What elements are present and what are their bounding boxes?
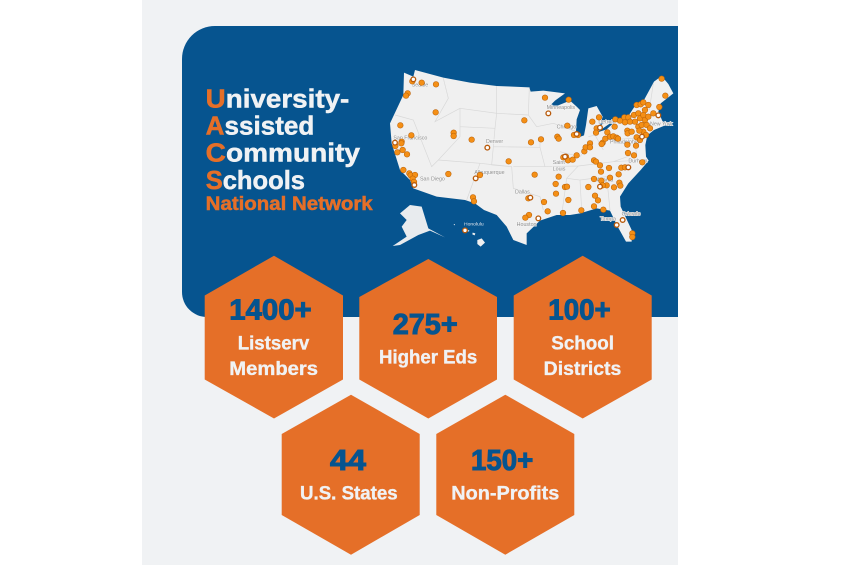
- stat hexagon: School Districts: 100+: [548, 294, 611, 326]
- stat hexagon: U.S. States: U.S. States: [300, 484, 398, 505]
- map: United States with network member locations: [390, 70, 673, 247]
- map: city labels: Atlanta: [597, 177, 613, 183]
- map: member location dots: [392, 76, 668, 240]
- map: Alaska: [393, 205, 445, 246]
- stat hexagon: Non-Profits: [436, 395, 574, 555]
- stat hexagon: Listserv Members: [205, 256, 343, 418]
- map: city labels: Dallas: [515, 189, 530, 195]
- map: city labels: [393, 83, 673, 228]
- stat hexagon: Higher Eds: 275+: [393, 309, 458, 341]
- title: Schools: [206, 165, 305, 195]
- map: city labels: Orlando: [622, 211, 641, 217]
- map: major city ring markers: [393, 77, 661, 233]
- map: city labels: Durham: [628, 159, 648, 165]
- map: city labels: Saint: [553, 160, 565, 166]
- stat hexagon: Higher Eds: [359, 259, 497, 418]
- panel: blue header: [182, 26, 678, 317]
- map: city labels: New York: [650, 121, 673, 127]
- title: University-: [206, 84, 349, 114]
- map: city labels: Houston: [517, 222, 537, 228]
- map: Hawaii: [454, 224, 485, 247]
- title: [206, 84, 361, 195]
- stat hexagon: Higher Eds: Higher Eds: [379, 348, 477, 369]
- stat hexagon: School Districts: [514, 256, 652, 418]
- map: city labels: Albuquerque: [474, 170, 505, 176]
- stat hexagon: Listserv Members: 1400+: [229, 294, 312, 326]
- subtitle: National Network: [206, 194, 373, 215]
- title: Assisted: [206, 111, 314, 141]
- stat hexagon: Non-Profits: Non-Profits: [451, 484, 559, 505]
- map: city labels: San Diego: [420, 177, 445, 183]
- map: city labels: Louis: [553, 167, 566, 173]
- map: contiguous states outline: [390, 70, 673, 245]
- map: city labels: Philadelphia: [610, 139, 639, 145]
- map: city labels: Chicago: [557, 125, 576, 131]
- map: city labels: Honolulu: [464, 222, 484, 228]
- stat hexagon: Listserv Members: Members: [229, 359, 318, 380]
- map: city labels: Detroit: [598, 119, 615, 125]
- title: Community: [206, 138, 361, 168]
- stat hexagon: School Districts: Districts: [544, 359, 621, 380]
- map: city labels: Seattle: [412, 83, 428, 89]
- map: city labels: Minneapolis: [547, 105, 575, 111]
- stat hexagon: School Districts: School: [551, 333, 614, 354]
- map: city labels: Tampa: [600, 217, 616, 223]
- map: city labels: San Francisco: [393, 135, 427, 141]
- stat hexagon: U.S. States: [282, 395, 420, 555]
- map: city labels: Denver: [486, 139, 503, 145]
- panel: page background: [142, 0, 678, 565]
- stat hexagon: U.S. States: 44: [330, 445, 366, 477]
- stat hexagon: Listserv Members: Listserv: [238, 333, 310, 354]
- stat hexagon: Non-Profits: 150+: [471, 445, 533, 477]
